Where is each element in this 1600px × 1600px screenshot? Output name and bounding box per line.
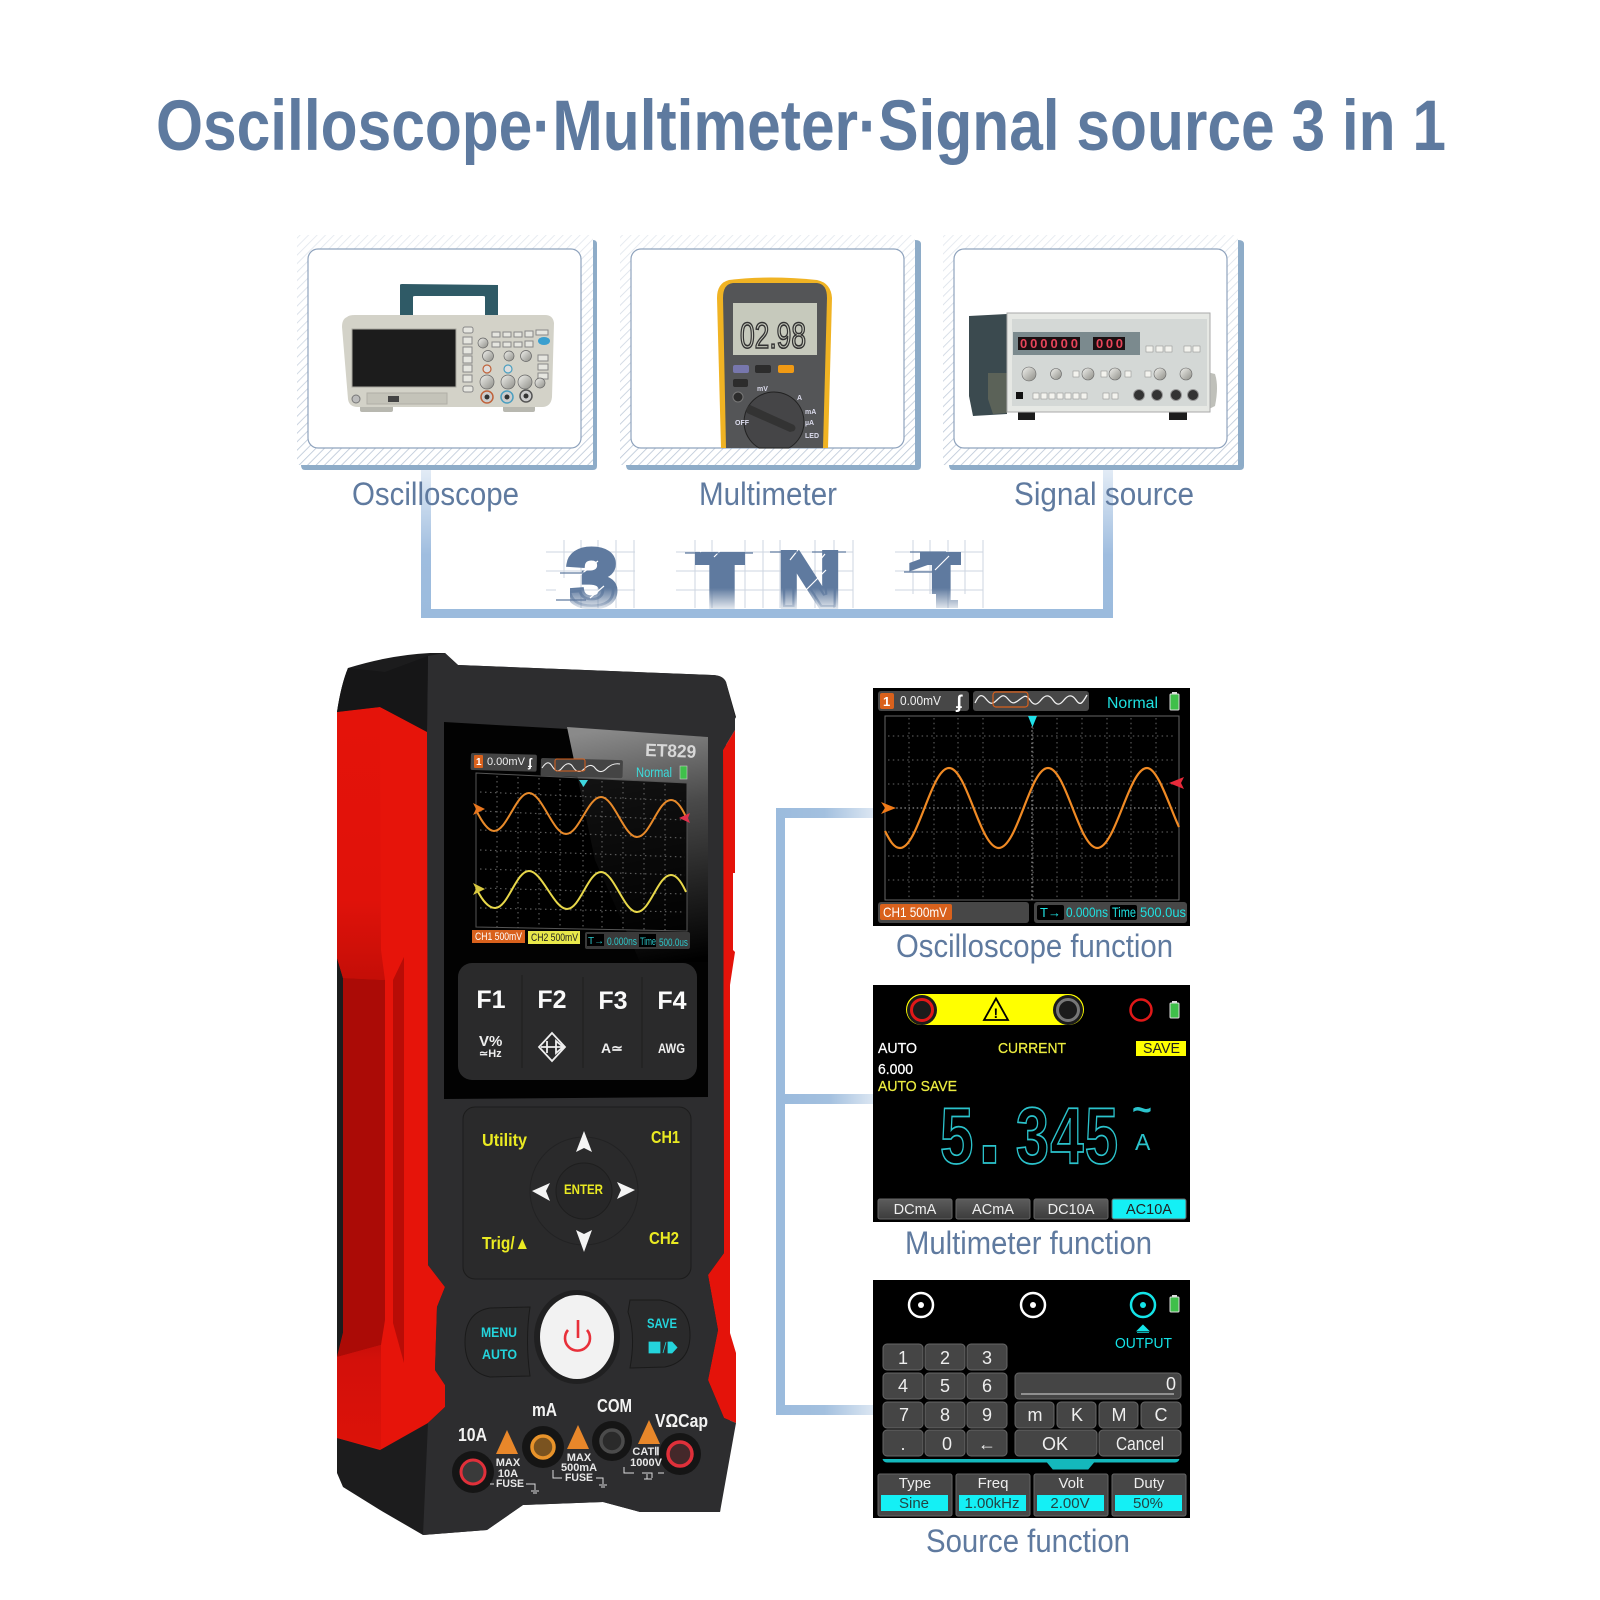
status bar: 0.00mV — [900, 693, 941, 708]
unit keys: OK — [1042, 1434, 1068, 1454]
keypad: 2 — [940, 1348, 950, 1368]
heading: 3 IN 1 blueprint lettering: 3 — [566, 533, 618, 624]
LCD status bar: 1 — [476, 757, 482, 768]
icon: bench signal generator — [969, 313, 1217, 420]
dark side facet — [337, 978, 385, 1357]
keypad: 4 — [898, 1376, 908, 1396]
red grip groove — [393, 957, 404, 1363]
keypad: . — [900, 1434, 906, 1454]
icon: handheld multimeter: A — [797, 395, 802, 402]
caption: source function: Source function — [926, 1523, 1130, 1559]
panel: multimeter function screen — [873, 985, 1190, 1222]
channel 2 trace — [476, 871, 686, 912]
parameter tabs: Type — [899, 1475, 931, 1492]
unit keys: m — [1028, 1405, 1042, 1425]
jack COM — [592, 1421, 632, 1461]
panel: multimeter function screen: AUTO — [878, 1040, 917, 1057]
function key panel: ≃Hz — [479, 1048, 502, 1060]
bottom bar: Time — [1112, 904, 1136, 920]
panel: multimeter card — [620, 235, 921, 470]
value display — [1015, 1373, 1181, 1399]
parameter tabs: 1.00kHz — [964, 1495, 1020, 1512]
oscilloscope grid — [885, 716, 1179, 900]
unit keys: K — [1071, 1405, 1083, 1425]
bottom bar: 500.0us — [1140, 904, 1186, 920]
LCD bottom bar: 0.000ns — [607, 936, 637, 948]
menu auto key: MENU — [481, 1324, 517, 1340]
unit keys: C — [1154, 1405, 1168, 1425]
caption: multimeter function: Multimeter function — [905, 1225, 1152, 1261]
model name: ET829 — [645, 740, 697, 762]
icon: bench signal generator: 000 — [1096, 336, 1123, 351]
input terminals: 10A — [498, 1468, 518, 1480]
keypad: 6 — [982, 1376, 992, 1396]
heading: 3 IN 1 blueprint lettering — [546, 533, 983, 626]
input terminals: MAX — [567, 1452, 592, 1464]
keypad: 5 — [940, 1376, 950, 1396]
unit keys: Cancel — [1116, 1434, 1164, 1454]
keypad: 8 — [940, 1405, 950, 1425]
icon: benchtop oscilloscope — [342, 284, 554, 412]
keypad: ← — [978, 1434, 996, 1454]
navigation key panel: Utility — [482, 1130, 527, 1150]
icon: battery — [1170, 692, 1179, 710]
status bar: ʄ — [955, 692, 963, 712]
icon: handheld multimeter: LED — [805, 433, 819, 440]
panel: oscilloscope card — [297, 235, 597, 470]
parameter tabs: Volt — [1058, 1475, 1084, 1492]
panel: oscilloscope function screen — [873, 688, 1190, 926]
input terminals: FUSE — [496, 1478, 524, 1490]
panel: multimeter function screen: CURRENT — [998, 1040, 1066, 1057]
mode buttons — [878, 1199, 1186, 1219]
save key: SAVE — [647, 1315, 677, 1331]
panel: source function screen — [873, 1280, 1190, 1518]
bottom bar: T→ — [1040, 905, 1061, 920]
input terminals: 1000V — [630, 1457, 663, 1469]
mode buttons: DCmA — [894, 1202, 937, 1218]
reading: 4 — [1050, 1091, 1084, 1180]
jack mA — [522, 1426, 564, 1468]
icon: handheld multimeter — [717, 278, 832, 448]
parameter tabs: 50% — [1133, 1495, 1163, 1512]
jack V-ohm-cap — [659, 1433, 701, 1475]
function key panel: F4 — [657, 987, 687, 1015]
icon: handheld multimeter: 02.98 — [740, 315, 806, 356]
menu auto key — [465, 1307, 530, 1377]
input terminals: COM — [597, 1396, 632, 1416]
unit keys: M — [1112, 1405, 1126, 1425]
LCD status bar: 0.00mV — [487, 756, 526, 768]
menu auto key: AUTO — [482, 1346, 517, 1362]
mode buttons: ACmA — [972, 1202, 1014, 1218]
LCD status bar — [471, 753, 687, 780]
mode buttons: DC10A — [1048, 1202, 1095, 1218]
parameter tabs: 2.00V — [1050, 1495, 1090, 1512]
reading: 3 — [1016, 1091, 1049, 1180]
markers — [881, 716, 1184, 814]
red left grip — [337, 707, 445, 1450]
connector: top three cards to 3 IN 1 — [421, 465, 1113, 618]
input terminals: VΩCap — [655, 1411, 708, 1431]
status bar — [878, 691, 1179, 712]
save key — [628, 1300, 690, 1368]
sine trace — [885, 768, 1179, 848]
heading: 3 IN 1 blueprint lettering: I — [698, 538, 746, 626]
icon: bench signal generator: 000000 — [1020, 336, 1078, 351]
connector: device to function screens — [776, 808, 873, 1415]
icon: handheld multimeter: mV — [757, 386, 768, 393]
label: Signal source: Signal source — [1014, 476, 1194, 512]
glass reflection — [567, 727, 708, 962]
reading: 5 — [940, 1091, 973, 1180]
panel: multimeter function screen: AUTO SAVE — [878, 1078, 957, 1095]
function key panel: A≃ — [601, 1040, 623, 1056]
status bar: Normal — [1107, 695, 1158, 712]
function key panel: F1 — [476, 986, 506, 1014]
output rings — [909, 1293, 1155, 1317]
input terminals: FUSE — [565, 1472, 593, 1484]
input terminals: 10A — [458, 1425, 487, 1445]
power button — [534, 1290, 620, 1384]
LCD bottom bar: CH2 500mV — [531, 932, 579, 944]
warning pill: ! — [994, 1005, 998, 1021]
keypad: 1 — [898, 1348, 908, 1368]
icon: diode bridge — [539, 1033, 565, 1061]
navigation key panel — [463, 1107, 691, 1279]
lower left facet — [337, 1345, 381, 1449]
icon: handheld multimeter: mA — [805, 409, 816, 416]
panel: signal source card — [943, 235, 1244, 470]
red right grip — [708, 730, 736, 1423]
keypad: 0 — [942, 1434, 952, 1454]
label: Multimeter: Multimeter — [699, 476, 837, 512]
function key panel: F3 — [598, 987, 628, 1015]
navigation key panel: Trig/▲ — [482, 1233, 530, 1253]
LCD status bar: Normal — [636, 764, 672, 780]
warning pill — [906, 994, 1084, 1025]
function key panel — [458, 963, 697, 1080]
parameter tabs: Sine — [899, 1495, 929, 1512]
device body — [423, 653, 736, 1535]
panel: multimeter function screen: A — [1135, 1129, 1151, 1155]
bottom bar — [878, 902, 1187, 923]
icon: battery — [1170, 1001, 1179, 1018]
jack 10A — [452, 1451, 494, 1493]
navigation key panel: CH1 — [651, 1127, 680, 1147]
panel: multimeter function screen: 6.000 — [878, 1061, 913, 1078]
bottom bar: 0.000ns — [1066, 904, 1108, 920]
reading: . — [978, 1059, 1001, 1188]
caption: oscilloscope function: Oscilloscope function — [896, 928, 1173, 964]
function key panel: V% — [479, 1033, 502, 1050]
parameter tabs: Freq — [978, 1475, 1008, 1492]
value display: 0 — [1166, 1374, 1176, 1394]
input terminals: CATⅡ — [632, 1446, 660, 1458]
panel: multimeter function screen: ~ — [1132, 1091, 1152, 1129]
parameter tabs: Duty — [1134, 1475, 1165, 1492]
bottom bar: CH1 500mV — [883, 904, 948, 920]
heading: 3 IN 1 blueprint lettering: 1 — [900, 537, 976, 625]
screen glass — [444, 722, 708, 1099]
LCD bottom bar — [472, 930, 690, 949]
arrows: direction keys — [532, 1131, 635, 1252]
navigation key panel: ENTER — [564, 1181, 603, 1197]
icon: battery — [1170, 1295, 1179, 1312]
function key panel: F2 — [537, 986, 567, 1014]
keypad: 3 — [982, 1348, 992, 1368]
navigation key panel: CH2 — [649, 1228, 679, 1248]
label: Oscilloscope: Oscilloscope — [352, 476, 519, 512]
keypad: 9 — [982, 1405, 992, 1425]
reading: 5 — [1085, 1091, 1118, 1180]
icon: handheld multimeter: µA — [805, 420, 814, 427]
LCD bottom bar: 500.0us — [659, 937, 688, 949]
panel: multimeter function screen: SAVE — [1143, 1040, 1180, 1057]
LCD status bar: ʄ — [527, 756, 533, 770]
parameter tabs — [878, 1474, 1186, 1516]
input terminals: MAX — [496, 1457, 521, 1469]
keypad: 7 — [899, 1405, 909, 1425]
input terminals: 500mA — [561, 1462, 597, 1474]
warning triangles — [496, 1420, 660, 1454]
upper left facet — [337, 707, 385, 980]
panel: source function screen: OUTPUT — [1115, 1335, 1172, 1352]
LCD bottom bar: T→ — [588, 936, 604, 947]
heading: 3 IN 1 blueprint lettering: N — [777, 535, 842, 624]
icon: handheld multimeter: OFF — [735, 420, 750, 427]
input terminals — [452, 1396, 708, 1493]
channel 1 trace — [476, 793, 686, 837]
unit keys — [1015, 1402, 1181, 1456]
mode buttons: AC10A — [1126, 1202, 1172, 1218]
device silhouette — [337, 653, 736, 1535]
LCD bottom bar: Time — [640, 936, 656, 948]
panel: handheld device ET829 — [337, 653, 736, 1535]
LCD bottom bar: CH1 500mV — [475, 931, 523, 943]
LCD waveform display — [473, 773, 690, 931]
keypad — [883, 1344, 1007, 1456]
status bar: 1 — [883, 694, 890, 709]
input terminals: mA — [532, 1400, 557, 1420]
function key panel: AWG — [658, 1041, 685, 1056]
